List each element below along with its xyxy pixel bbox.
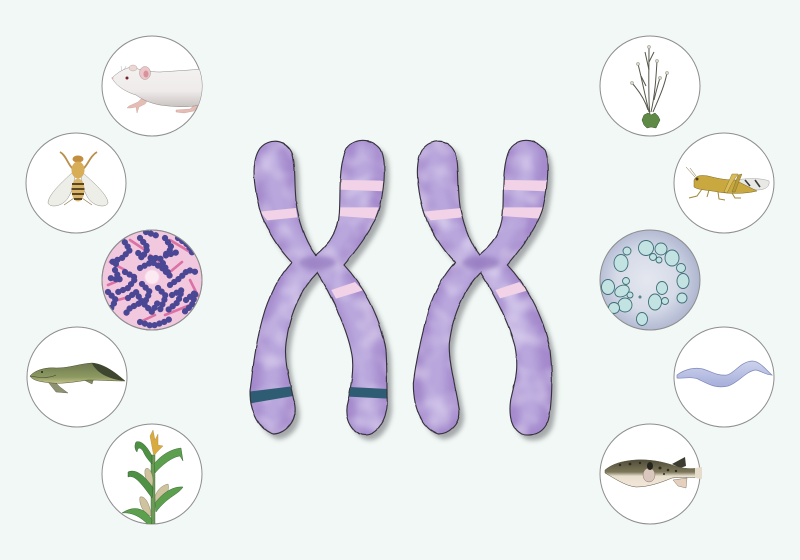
- panel: mouse: [102, 36, 204, 136]
- icon: yeast cells: [602, 240, 689, 326]
- panel: maize: [102, 424, 202, 528]
- panel: yeast cells: [600, 230, 700, 330]
- icon: thale cress: [630, 45, 669, 128]
- icon: nematode worm: [677, 361, 772, 387]
- icon: pufferfish: [605, 457, 702, 488]
- panel: thale cress: [600, 36, 700, 136]
- icon: fruit fly: [48, 152, 108, 206]
- panel: pufferfish: [600, 424, 702, 524]
- icon: locust: [686, 167, 769, 200]
- pink and dark bands: [249, 180, 388, 403]
- left chromosome: [249, 140, 394, 443]
- pink bands: [423, 180, 549, 298]
- panel: fruit fly: [26, 133, 126, 233]
- panel: bacteria micrograph: [102, 230, 202, 330]
- icon: white mouse: [112, 65, 204, 113]
- panel: lungfish: [27, 327, 127, 427]
- icon: stained bacteria clusters: [108, 232, 198, 326]
- right chromosome: [412, 140, 560, 443]
- panel: locust: [674, 133, 774, 233]
- panel: nematode worm: [674, 327, 774, 427]
- chromosome pair: [240, 130, 560, 443]
- icon: lungfish: [30, 363, 125, 393]
- icon: maize plant: [122, 430, 183, 528]
